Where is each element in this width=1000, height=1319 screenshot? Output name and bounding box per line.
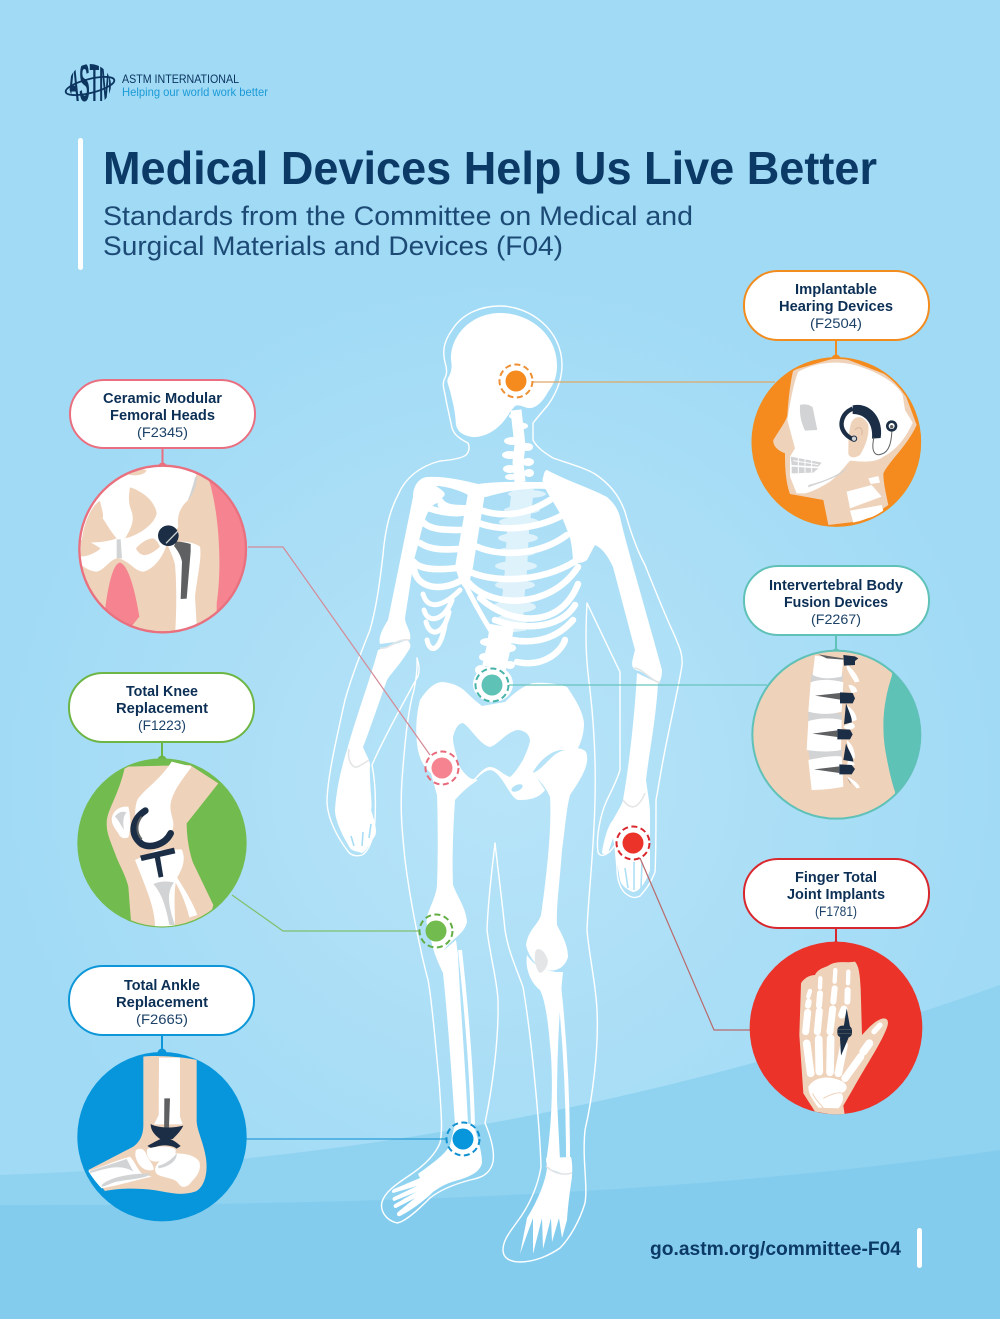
label pill: Hearing Devices (779, 299, 893, 315)
faded thoracic spine (492, 488, 546, 632)
subtitle: Surgical Materials and Devices (F04) (103, 231, 563, 261)
website url (650, 1228, 922, 1268)
left femur (427, 770, 478, 950)
leader lines (232, 382, 775, 1139)
website url: go.astm.org/committee-F04 (650, 1239, 901, 1260)
label pill: (F2267) (811, 612, 861, 627)
cervical spine (502, 410, 534, 482)
label pill (70, 380, 255, 448)
connector (833, 928, 839, 947)
connector (158, 742, 166, 764)
label pill: Total Knee (126, 684, 198, 700)
left forearm and hand (335, 640, 410, 853)
label pill: Total Ankle (124, 978, 200, 994)
wrist and ankle joint lines (349, 640, 660, 1174)
marker: knee (420, 914, 452, 948)
label pill: (F1223) (138, 718, 186, 733)
label pill: (F1781) (815, 904, 857, 919)
knee cap shading (535, 949, 548, 973)
illustration: hip implant (73, 463, 247, 637)
label pill: Femoral Heads (110, 408, 215, 424)
connector (832, 340, 840, 364)
label pill: (F2345) (137, 425, 188, 440)
panel: finger total joint implants (744, 859, 929, 1117)
connector (158, 1035, 166, 1058)
label pill: (F2504) (810, 316, 862, 331)
illustration: spinal fusion (747, 645, 921, 825)
skull (447, 313, 557, 437)
panel: total knee replacement (69, 673, 254, 930)
title: Medical Devices Help Us Live Better (103, 142, 877, 194)
right scapula and humerus (543, 470, 662, 683)
label pill (744, 859, 929, 928)
illustration: ankle implant (77, 1052, 247, 1221)
lumbar spine (473, 626, 516, 702)
tagline: Helping our world work better (122, 85, 268, 99)
human body outline (327, 306, 682, 1262)
logo (64, 64, 268, 102)
marker: ear (500, 364, 532, 398)
panel: intervertebral body fusion devices (744, 566, 929, 825)
panel: ceramic modular femoral heads (70, 380, 255, 637)
label pill: Implantable (795, 282, 877, 298)
panel: total ankle replacement (69, 966, 254, 1221)
logo mark: ASTM globe (64, 64, 116, 102)
label pill: Replacement (116, 995, 208, 1011)
subtitle: Standards from the Committee on Medical and (103, 201, 693, 231)
clavicles and left shoulder (380, 477, 547, 644)
panel: implantable hearing devices (744, 271, 929, 527)
label pill: Ceramic Modular (103, 391, 222, 407)
right foot (520, 1168, 572, 1254)
label pill (69, 673, 254, 742)
title block (78, 138, 877, 270)
marker: ankle (446, 1122, 480, 1156)
right forearm and hand (602, 673, 658, 892)
right tibia and fibula (527, 955, 572, 1177)
marker: finger (616, 826, 650, 860)
sternum (455, 493, 485, 592)
label pill: (F2665) (136, 1012, 188, 1027)
connector (158, 448, 167, 472)
illustration: knee implant (77, 758, 247, 930)
right femur (526, 748, 587, 970)
label pill (69, 966, 254, 1035)
organisation name: ASTM INTERNATIONAL (122, 72, 239, 86)
connector (832, 635, 840, 658)
label pill: Joint Implants (787, 887, 885, 903)
label pill (744, 271, 929, 340)
ribs (414, 500, 580, 663)
marker: spine (476, 668, 508, 702)
subtitle (103, 201, 693, 261)
left tibia and fibula (428, 925, 473, 1124)
illustration: hearing implant (752, 357, 921, 527)
marker: hip (426, 752, 458, 784)
pelvis (416, 682, 584, 800)
label pill: Intervertebral Body (769, 578, 903, 594)
label pill: Replacement (116, 701, 208, 717)
label pill: Finger Total (795, 870, 877, 886)
logo mark: ASTM globe: ASTM (68, 52, 112, 113)
label pill: Fusion Devices (784, 595, 888, 611)
skeleton (335, 313, 662, 1254)
left foot (392, 1124, 482, 1216)
label pill (744, 566, 929, 635)
illustration: hand implant (750, 942, 922, 1117)
